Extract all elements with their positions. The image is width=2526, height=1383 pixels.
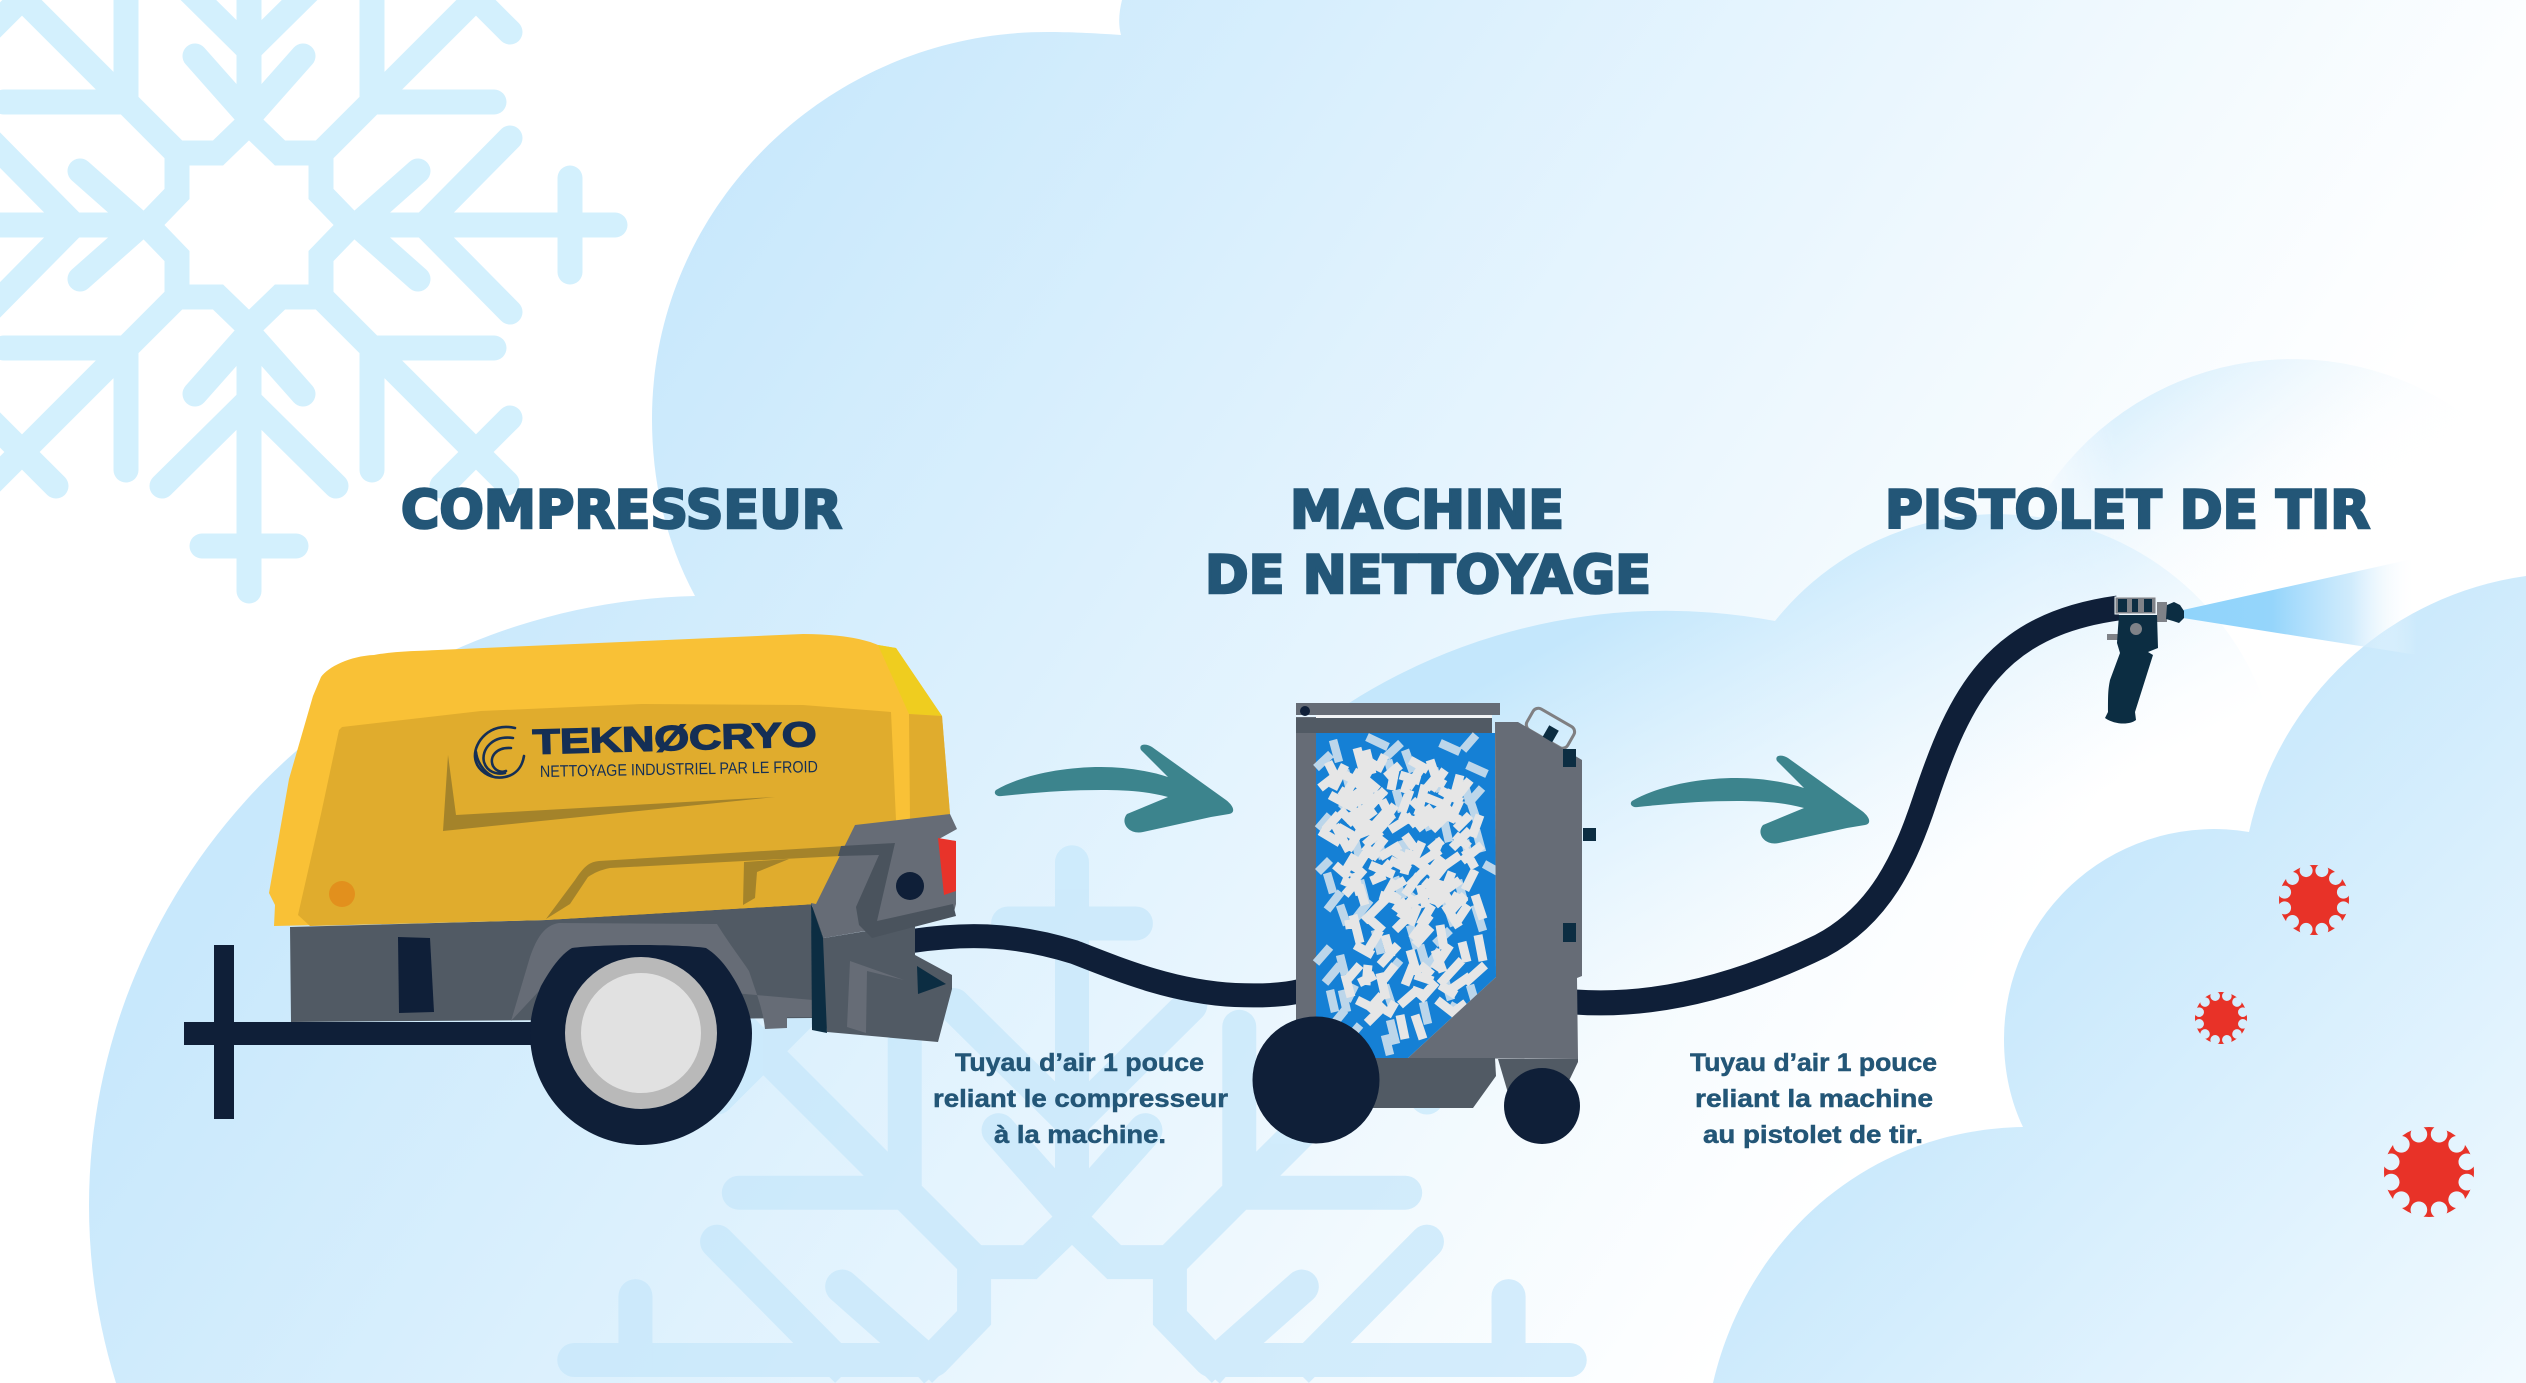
caption: hose from compressor: reliant le compresseur [933,1085,1228,1113]
canopy panel [298,704,896,926]
hub [581,973,701,1093]
side button [1583,828,1596,841]
handle [1521,706,1577,756]
bumper strip [811,903,827,1033]
top dot [1300,706,1310,716]
trigger [2107,634,2118,640]
machine body [1408,722,1582,1059]
left frame [1296,717,1316,1022]
virus: large [2384,1127,2474,1217]
logo wordmark: TEKNØCRYO [532,715,817,762]
nozzle base [2157,602,2167,622]
orange light [329,881,355,907]
bumper shading [838,843,956,938]
rear leg [1498,1059,1578,1093]
wheel-arch crease [546,843,895,919]
small crease [743,859,789,905]
rim [565,957,717,1109]
spray gun [2105,597,2184,724]
snowflake: bottom centre [574,862,1570,1371]
bumper triangle [917,966,946,994]
arrow: machine to gun [1631,756,1869,843]
logo tagline: NETTOYAGE INDUSTRIEL PAR LE FROID [540,758,818,781]
caption: hose from compressor: à la machine. [994,1121,1166,1149]
top bar [1296,703,1500,715]
gun screw [2130,623,2142,635]
caption: hose from compressor: Tuyau d’air 1 pouce [955,1049,1204,1077]
bumper light panel [847,961,904,1033]
gun collar [2115,597,2156,614]
upper bumper [811,814,957,938]
top highlight [1316,715,1492,718]
second bar [1296,718,1492,733]
heading: machine de nettoyage: MACHINE [1290,480,1564,541]
yellow canopy [269,634,950,926]
tyre [530,945,752,1145]
logo [475,715,818,781]
caption: hose to gun: reliant la machine [1695,1085,1933,1113]
heading: pistolet de tir: PISTOLET DE TIR [1885,480,2370,541]
virus: upper [2279,865,2349,935]
canopy swoosh [443,755,775,831]
bumper hole [896,872,924,900]
heading: machine de nettoyage: DE NETTOYAGE [1205,545,1651,606]
blue hopper [1316,733,1496,1058]
air hose: machine to gun [1575,608,2118,1003]
tow bar [184,945,531,1119]
arrow: compressor to machine [995,745,1233,832]
caption: hose from compressor [933,1049,1228,1149]
dry-ice pellets, white [1320,748,1485,1039]
cloud: bottom right [1713,576,2526,1383]
heading: compresseur: COMPRESSEUR [401,480,842,541]
cleaning machine [1252,703,1596,1144]
gun body and grip [2105,615,2158,724]
air hose: compressor to machine [912,936,1300,995]
snowflake: top left [0,0,615,591]
chassis [290,903,813,1022]
lower base [1373,1058,1496,1108]
caption: hose to gun: Tuyau d’air 1 pouce [1690,1049,1937,1077]
front wheel [1252,1016,1380,1144]
logo swirl [475,727,524,778]
chassis slot [398,937,434,1013]
lower bumper [812,904,952,1042]
side clip top [1563,749,1576,767]
compressor [184,634,957,1145]
caption: hose to gun: au pistolet de tir. [1703,1121,1923,1149]
caption: hose to gun [1690,1049,1937,1149]
cloud: top-right faded [2064,359,2370,542]
heading: machine de nettoyage [1205,480,1651,606]
side clip bottom [1563,923,1576,942]
fender [511,923,813,1029]
nozzle [2166,602,2184,623]
spray cone [2183,558,2417,655]
virus: small [2195,992,2247,1044]
dry-ice pellets, light [1316,735,1502,1055]
cloud: centre and centre-right [1296,514,2281,1106]
rear wheel [1504,1068,1580,1144]
canopy corner [878,645,942,716]
collar stripes [2118,599,2152,612]
canopy side panel [909,714,950,819]
red tail light [938,838,956,895]
